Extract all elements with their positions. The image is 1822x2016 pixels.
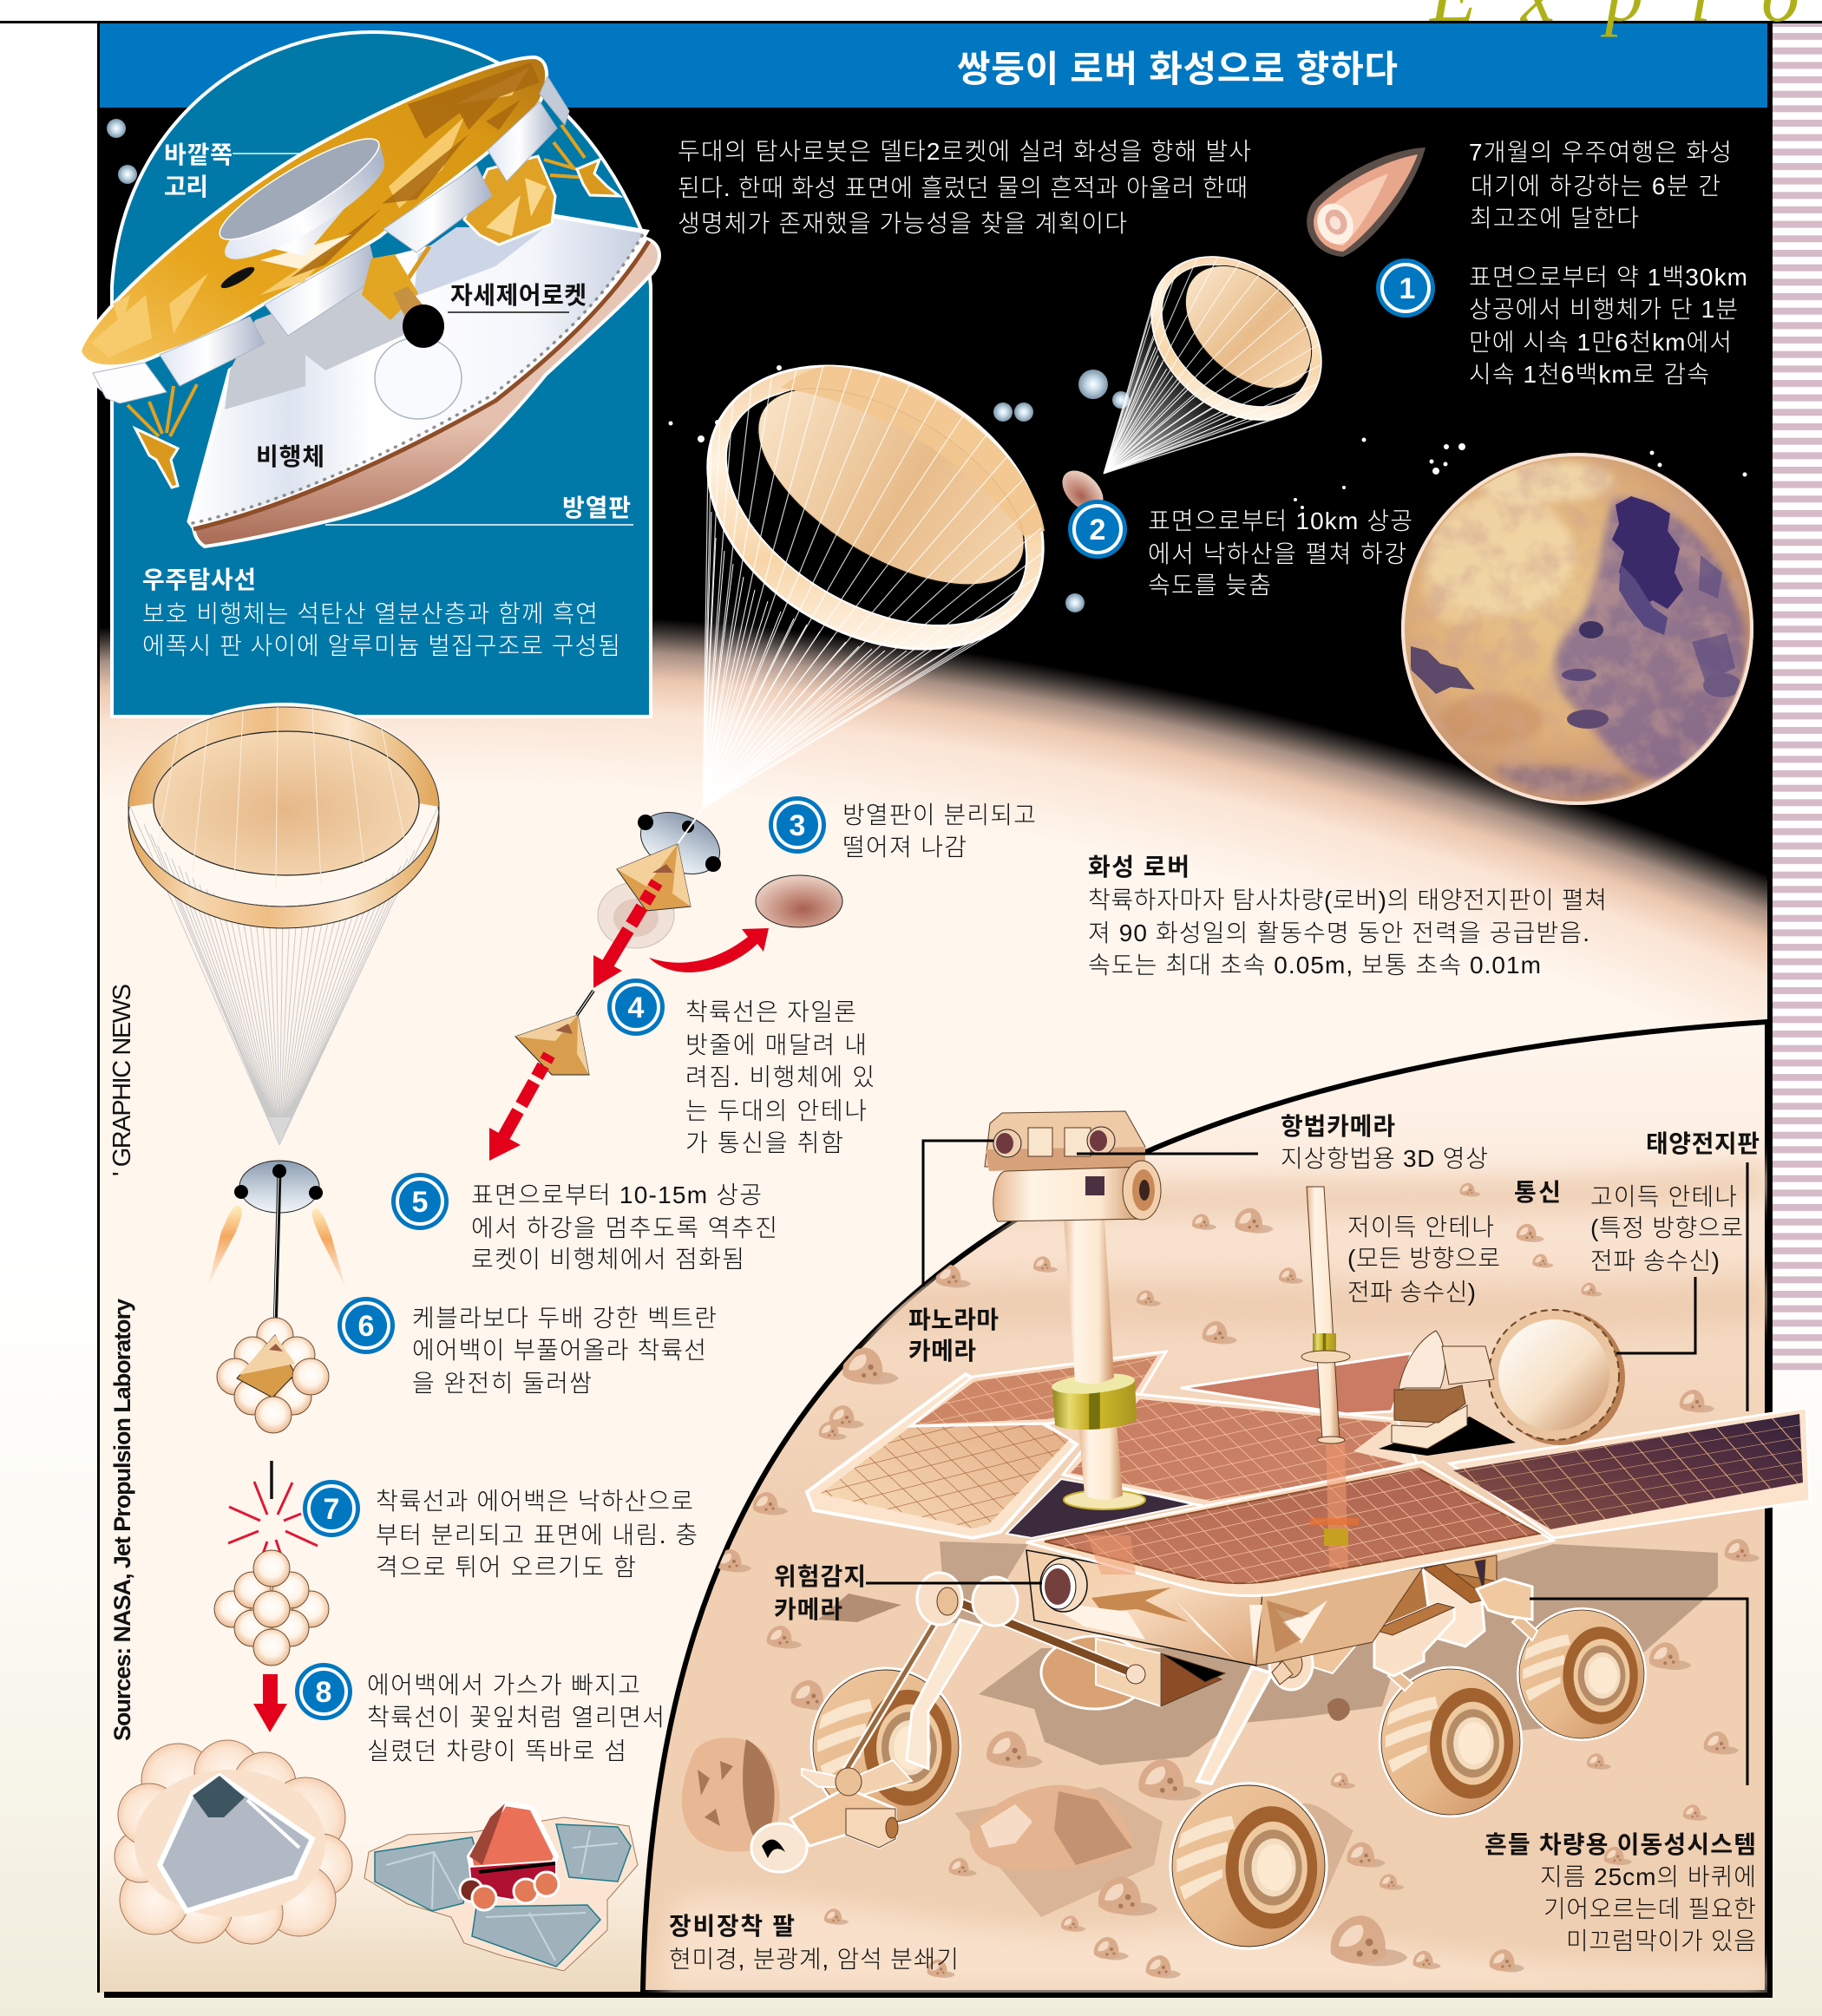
rover undercarriage	[1041, 1555, 1532, 1709]
label: mobility system: 기어오르는데 필요한	[1543, 1895, 1756, 1922]
step 4 text: 착륙선은 자일론	[685, 998, 856, 1025]
mast base	[1064, 1490, 1145, 1509]
hazard avoidance camera	[1040, 1558, 1087, 1612]
step 4 badge: 4	[628, 992, 645, 1024]
step 1 text: 표면으로부터 약 1백30km	[1469, 264, 1747, 291]
caption: spacecraft: 에폭시 판 사이에 알루미늄 벌집구조로 구성됨	[142, 632, 620, 659]
front right wheel	[1169, 1782, 1328, 1950]
rover summary text: 져 90 화성일의 활동수명 동안 전력을 공급받음.	[1088, 920, 1589, 946]
rover body	[1026, 1550, 1423, 1666]
step 1 badge: 1	[1399, 272, 1415, 305]
label: low gain antenna: (모든 방향으로	[1347, 1245, 1500, 1272]
label: heat shield: 방열판	[562, 494, 631, 521]
rover ground panel	[643, 1022, 1767, 1993]
lander on tether	[515, 991, 593, 1075]
main parachute	[128, 703, 439, 1145]
step 6 text: 케블라보다 두배 강한 벡트란	[412, 1305, 717, 1332]
step 4 text: 가 통신을 취함	[685, 1129, 843, 1156]
text: cruise: 7개월의 우주여행은 화성	[1469, 139, 1732, 166]
step 8 text: 착륙선이 꽃잎처럼 열리면서	[367, 1704, 665, 1731]
intro text	[678, 138, 1251, 237]
right solar panel	[1450, 1408, 1810, 1538]
step 1 text	[1469, 264, 1747, 388]
label: low gain antenna: 저이득 안테나	[1347, 1214, 1494, 1240]
label: hazard camera: 위험감지	[774, 1563, 866, 1590]
caption: spacecraft: 우주탐사선	[142, 566, 256, 593]
text: cruise: 최고조에 달한다	[1470, 205, 1639, 232]
step 1 badge	[1376, 259, 1435, 317]
title: 쌍둥이 로버 화성으로 향하다	[957, 49, 1398, 89]
step 2 text: 에서 낙하산을 펼쳐 하강	[1148, 540, 1406, 567]
step 5 badge	[391, 1173, 449, 1230]
front solar panel	[1026, 1462, 1553, 1596]
text: cruise	[1469, 139, 1732, 232]
inset panel: spacecraft	[80, 32, 659, 717]
step 7 badge: 7	[324, 1493, 339, 1526]
label: mobility system: 미끄럼막이가 있음	[1566, 1928, 1756, 1954]
rover front leg	[1197, 1638, 1313, 1784]
leader line: panoramic camera	[923, 1141, 993, 1286]
step 8 badge	[295, 1663, 352, 1720]
step 7 text: 착륙선과 에어백은 낙하산으로	[376, 1488, 693, 1515]
label: panoramic camera	[908, 1306, 999, 1365]
label: hazard camera	[774, 1563, 866, 1623]
intro text: 생명체가 존재했을 가능성을 찾을 계획이다	[678, 210, 1127, 237]
camera head	[985, 1111, 1161, 1221]
step 6 badge: 6	[358, 1310, 374, 1343]
leader line: high gain antenna	[1616, 1277, 1695, 1353]
rover leg to rear wheel	[1512, 1615, 1537, 1640]
step 6 text: 에어백이 부풀어올라 착륙선	[412, 1337, 706, 1364]
big parachute in descent	[658, 309, 1093, 808]
high gain antenna	[1379, 1310, 1625, 1456]
rover summary text	[1088, 854, 1607, 979]
label: panoramic camera: 카메라	[908, 1338, 976, 1365]
step 5 text	[471, 1181, 777, 1273]
striped side band	[1773, 23, 1822, 1371]
masthead letters	[1428, 0, 1799, 38]
middle wheel	[1379, 1666, 1523, 1817]
low gain antenna	[1301, 1187, 1350, 1443]
step 3 text: 방열판이 분리되고	[842, 802, 1036, 828]
step 7 text: 부터 분리되고 표면에 내림. 충	[376, 1522, 698, 1548]
stars	[107, 119, 1747, 612]
step 7 text	[376, 1488, 698, 1581]
step 4 badge	[607, 979, 665, 1036]
panoramic mast lower	[1078, 1423, 1123, 1500]
step 3 badge	[769, 796, 826, 854]
robotic arm	[751, 1573, 1145, 1872]
upper left solar panel	[910, 1352, 1166, 1426]
rover summary text: 착륙하자마자 탐사차량(로버)의 태양전지판이 펼쳐	[1088, 887, 1607, 913]
step 2 text: 표면으로부터 10km 상공	[1148, 507, 1412, 534]
label: high gain antenna: 전파 송수신)	[1590, 1247, 1720, 1274]
red curved arrow: heat shield falling away	[649, 928, 769, 972]
planet Mars	[1397, 447, 1761, 811]
step 7 text: 격으로 튀어 오르기도 함	[376, 1554, 636, 1581]
header bar	[100, 23, 1767, 108]
step 8 text	[367, 1672, 665, 1764]
step 8 text: 실렸던 차량이 똑바로 섬	[367, 1738, 626, 1764]
label: instrument arm: 장비장착 팔	[669, 1913, 795, 1940]
label: outer ring: 바깥쪽	[164, 141, 233, 168]
large rock centre	[970, 1785, 1133, 1870]
step 4 text	[685, 998, 875, 1156]
step 2 text: 속도를 늦춤	[1148, 572, 1271, 599]
deflated airbags with lander	[115, 1740, 352, 1944]
label: high gain antenna: 고이득 안테나	[1590, 1183, 1737, 1210]
rover summary text: 화성 로버	[1088, 854, 1190, 880]
antenna and mast reflections on panels	[1087, 1442, 1359, 1574]
credit: sources: Sources: NASA, Jet Propulsion Laboratory	[109, 1299, 135, 1741]
leader line: navigation camera	[1077, 1152, 1258, 1155]
step 6 badge	[338, 1297, 395, 1354]
step 4 text: 밧줄에 매달려 내	[685, 1031, 867, 1058]
label: mobility system: 흔들 차량용 이동성시스템	[1484, 1831, 1756, 1858]
label: low gain antenna: 전파 송수신)	[1347, 1279, 1476, 1306]
label: panoramic camera: 파노라마	[908, 1306, 999, 1333]
label: mobility system: 지름 25cm의 바퀴에	[1540, 1863, 1756, 1890]
small parachute deploying	[1104, 223, 1353, 474]
step 2 text	[1148, 507, 1412, 599]
airbag cluster with lander	[217, 1318, 329, 1433]
rover summary text: 속도는 최대 초속 0.05m, 보통 초속 0.01m	[1088, 952, 1541, 979]
step 3 badge: 3	[790, 809, 805, 842]
gold collar	[1051, 1371, 1137, 1430]
comet: atmospheric entry	[1307, 147, 1425, 257]
caption: spacecraft: 보호 비행체는 석탄산 열분산층과 함께 흑연	[142, 600, 598, 627]
step 4 text: 려짐. 비행체에 있	[685, 1064, 875, 1090]
label: attitude rockets: 자세제어로켓	[450, 282, 587, 309]
step 1 text: 시속 1천6백km로 감속	[1469, 361, 1709, 388]
label: instrument arm: 현미경, 분광계, 암석 분쇄기	[669, 1946, 959, 1973]
white outer rim	[80, 351, 159, 392]
label: navigation camera: 지상항법용 3D 영상	[1281, 1145, 1488, 1172]
step 3 text	[842, 802, 1036, 861]
step 3 text: 떨어져 나감	[842, 834, 967, 861]
label: solar panel: 태양전지판	[1646, 1130, 1760, 1157]
step 5 text: 에서 하강을 멈추도록 역추진	[471, 1214, 777, 1241]
label: instrument arm	[669, 1913, 959, 1973]
step 7 badge	[303, 1480, 360, 1537]
step 8 text: 에어백에서 가스가 빠지고	[367, 1672, 640, 1699]
front-left wheel	[810, 1666, 961, 1826]
leader line: mobility system	[1530, 1599, 1747, 1785]
ground texture and shadows	[659, 1162, 1767, 1993]
step 8 badge: 8	[316, 1676, 331, 1709]
label: aeroshell: 비행체	[256, 443, 324, 470]
label: outer ring	[164, 141, 233, 200]
label: navigation camera: 항법카메라	[1281, 1113, 1395, 1140]
opened lander petals and rover	[364, 1803, 638, 1971]
step 6 text: 을 완전히 둘러쌈	[412, 1370, 592, 1397]
dark gap under panels	[1006, 1479, 1198, 1538]
label: low gain antenna	[1347, 1214, 1500, 1306]
label: navigation camera	[1281, 1113, 1488, 1172]
rover illustration	[751, 1111, 1810, 1950]
step 5 text: 로켓이 비행체에서 점화됨	[471, 1246, 744, 1273]
tether cut piece	[270, 1461, 273, 1499]
icon: spacecraft cruise stage and aeroshell	[80, 57, 659, 547]
rear solar panel	[1181, 1353, 1412, 1414]
separation burst	[228, 1482, 318, 1561]
red arrow down	[253, 1674, 287, 1732]
step 2 badge: 2	[1090, 514, 1105, 547]
leader line: hazard camera	[866, 1582, 1042, 1584]
label: high gain antenna: (특정 방향으로	[1590, 1214, 1743, 1241]
red arrow: dashed descent 2	[489, 1055, 549, 1161]
intro text: 두대의 탐사로봇은 델타2로켓에 실려 화성을 향해 발사	[678, 138, 1251, 165]
caption: spacecraft	[142, 566, 620, 659]
step 5 badge: 5	[412, 1186, 428, 1219]
panoramic mast upper	[1063, 1206, 1114, 1384]
step 4 text: 는 두대의 안테나	[685, 1097, 867, 1124]
backshell separation scene	[598, 801, 730, 948]
step 6 text	[412, 1305, 717, 1397]
intro text: 된다. 한때 화성 표면에 흘렀던 물의 흔적과 아울러 한때	[678, 174, 1248, 201]
step 1 text: 만에 시속 1만6천km에서	[1469, 329, 1732, 356]
leader line: outer ring	[233, 153, 305, 154]
label: mobility system	[1484, 1831, 1756, 1954]
label: hazard camera: 카메라	[774, 1596, 842, 1623]
bouncing airbag cluster	[214, 1550, 329, 1666]
left solar panel	[807, 1374, 1077, 1538]
rear wheel	[1517, 1607, 1647, 1741]
large rock left	[682, 1738, 780, 1852]
credit: graphic news: ' GRAPHIC NEWS	[108, 984, 136, 1176]
leader line: solar panel	[1746, 1162, 1749, 1411]
step 5 text: 표면으로부터 10-15m 상공	[471, 1181, 762, 1208]
red arrow: dashed descent 1	[593, 882, 657, 988]
label: high gain antenna	[1590, 1183, 1743, 1274]
centre solar panel	[1063, 1393, 1419, 1508]
falling heat shield	[756, 875, 842, 927]
solar panels	[807, 1352, 1810, 1596]
step 2 badge	[1068, 500, 1127, 559]
backshell with retro rockets and tether	[208, 1161, 345, 1333]
label: outer ring: 고리	[164, 173, 208, 200]
label: communications: 통신	[1514, 1179, 1561, 1206]
jettisoned heat shield small	[1054, 462, 1111, 520]
step 1 text: 상공에서 비행체가 단 1분	[1469, 296, 1738, 323]
text: cruise: 대기에 하강하는 6분 간	[1471, 173, 1720, 200]
